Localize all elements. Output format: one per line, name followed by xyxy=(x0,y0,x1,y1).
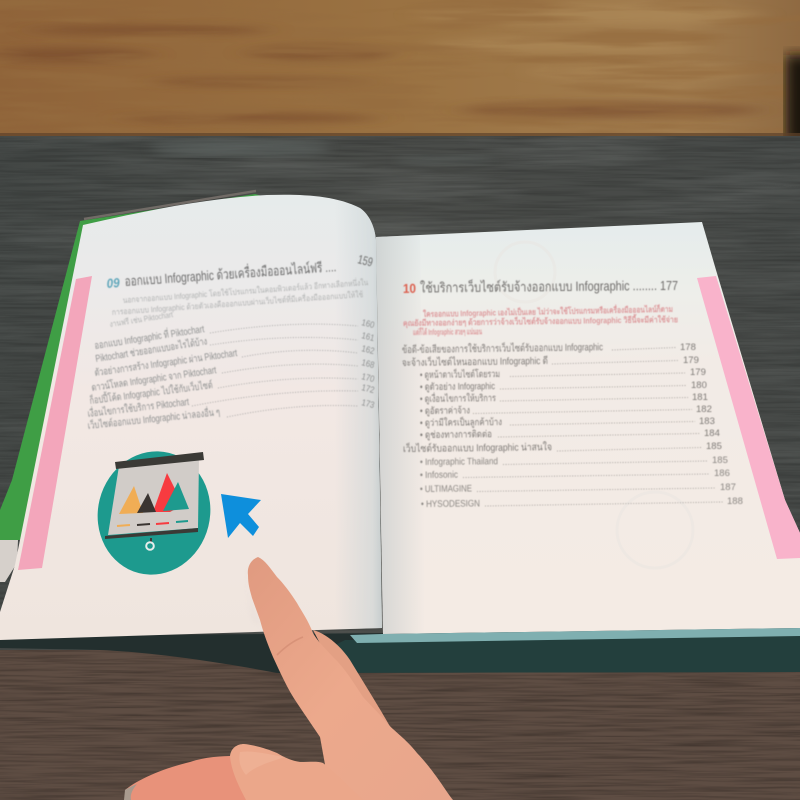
left toc row 160 xyxy=(93,317,376,352)
left intro paragraph: งานฟรี เช่น Piktochart xyxy=(109,310,174,329)
left toc row 162: 162 xyxy=(361,343,376,356)
teal circle backdrop xyxy=(85,439,223,587)
left toc row 161: Piktochart ช่วยออกแบบอะไรได้บ้าง xyxy=(95,335,208,365)
legend dashes xyxy=(117,521,188,526)
icon: blue cursor arrow xyxy=(221,494,261,538)
top bar xyxy=(115,452,204,469)
thumb shade xyxy=(239,752,285,775)
right chapter heading: ใช้บริการเว็บไซต์รับจ้างออกแบบ Infographic ........ xyxy=(420,276,657,295)
dark corner at wood right end xyxy=(786,55,800,145)
green back cover edge xyxy=(0,194,262,540)
right toc row 178: ข้อดี-ข้อเสียของการใช้บริการเว็บไซต์รับออกแบบ Infographic xyxy=(402,339,603,356)
left toc row 170: ก็อปปี้โค้ด Infographic ไปใช้กับเว็บไซต์ xyxy=(89,377,213,407)
projector screen xyxy=(108,458,199,535)
right toc row 180: • ดูตัวอย่าง Infographic xyxy=(420,381,495,393)
right toc row 178: 178 xyxy=(680,342,696,353)
thumb xyxy=(230,744,363,800)
index finger xyxy=(248,557,453,800)
right toc row 184: • ดูช่องทางการติดต่อ xyxy=(420,429,492,441)
right toc row HYSODESIGN: • HYSODESIGN xyxy=(421,498,480,510)
light wood tones xyxy=(447,10,746,74)
pull ring xyxy=(146,538,154,550)
right toc row 179: จะจ้างเว็บไซต์ไหนออกแบบ Infographic ดี xyxy=(402,353,548,369)
red intro paragraph: คุณยังมีทางออกง่ายๆ ด้วยการว่าจ้างเว็บไซต์รับจ้างออกแบบ Infographic วิธีนี้จะมีค่าใช้จ่าย xyxy=(403,312,678,329)
right toc row Infosonic: • Infosonic xyxy=(420,470,458,481)
left chapter heading: 09 xyxy=(106,275,121,291)
wooden wall background xyxy=(0,0,800,145)
right chapter heading: 177 xyxy=(660,279,678,293)
left toc row 168 xyxy=(91,357,376,394)
red intro paragraph: ใครออกแบบ Infographic เองไม่เป็นเลย ไม่ว่าจะใช้โปรแกรมหรือเครื่องมือออนไลน์ก็ตาม xyxy=(423,303,673,319)
fingernail xyxy=(124,784,137,800)
right toc row 182: • ดูอัตราค่าจ้าง xyxy=(420,405,470,417)
right toc row 183: 183 xyxy=(699,416,715,427)
right toc row 179: 179 xyxy=(683,355,699,366)
shadow of finger on page xyxy=(246,556,262,628)
left page table of contents xyxy=(87,252,376,432)
right toc row 179 sub: • ดูหน้าตาเว็บไซต์โดยรวม xyxy=(420,367,500,381)
right toc row 185: 185 xyxy=(706,441,722,452)
right toc row 181: 181 xyxy=(692,392,708,403)
teal book edge xyxy=(350,628,800,643)
right toc row 180 xyxy=(420,380,707,393)
right toc row 184: 184 xyxy=(704,428,720,439)
red intro paragraph: แต่ก็ได้ Infographic สวยๆ แน่นอน xyxy=(413,325,482,337)
right toc row 183: • ดูว่ามีใครเป็นลูกค้าบ้าง xyxy=(420,415,502,429)
left toc row 170: 170 xyxy=(361,371,376,384)
right toc row 179 sub xyxy=(420,367,706,381)
brown table lower edge xyxy=(0,650,800,800)
right toc row Infographic Thailand: 185 xyxy=(712,455,728,466)
left toc row 173: 173 xyxy=(361,397,376,410)
right toc row ULTIMAGINE: 187 xyxy=(720,482,736,493)
dark wood streaks xyxy=(0,25,760,123)
right toc row 179 xyxy=(402,353,699,369)
left page xyxy=(0,190,385,640)
right toc row 182 xyxy=(420,404,712,417)
left pink strip xyxy=(18,276,92,570)
left chapter heading: ออกแบบ Infographic ด้วยเครื่องมือออนไลน์ฟรี .... xyxy=(124,257,337,289)
right toc row 181 xyxy=(420,391,708,405)
left toc row 172: เงื่อนไขการใช้บริการ Piktochart xyxy=(87,394,190,420)
left toc row 161 xyxy=(95,330,376,365)
left toc row 161: 161 xyxy=(361,330,376,343)
left toc row 168: 168 xyxy=(361,357,376,370)
gray cover block at lower left xyxy=(0,540,18,582)
right toc row 184 xyxy=(420,428,720,441)
right toc row Infosonic xyxy=(420,468,730,481)
right toc row 179 sub: 179 xyxy=(690,367,706,378)
hand holding the book xyxy=(124,556,453,800)
right toc row 183 xyxy=(420,415,715,429)
right toc row 180: 180 xyxy=(691,380,707,391)
right toc row 181: • ดูเงื่อนไขการให้บริการ xyxy=(420,391,496,405)
left toc row 168: ดาวน์โหลด Infographic จาก Piktochart xyxy=(91,363,217,394)
faint watermark circles xyxy=(495,242,693,568)
shadow under book xyxy=(0,630,800,673)
right toc row 185 xyxy=(403,439,722,455)
left toc row 173 xyxy=(87,397,376,432)
left toc row 173: เว็บไซต์ออกแบบ Infographic น่าลองอื่น ๆ xyxy=(87,404,221,432)
right toc row HYSODESIGN: 188 xyxy=(727,496,743,507)
left toc row 172: 172 xyxy=(361,382,376,395)
right pink strip xyxy=(697,276,800,559)
red intro paragraph xyxy=(403,303,678,337)
right toc row ULTIMAGINE: • ULTIMAGINE xyxy=(420,483,472,495)
right toc row Infographic Thailand: • Infographic Thailand xyxy=(420,456,498,468)
right chapter heading: 10 xyxy=(403,281,416,296)
right toc row 182: 182 xyxy=(696,404,712,415)
middle finger behind xyxy=(313,630,392,730)
left toc row 162: ตัวอย่างการสร้าง Infographic ผ่าน Piktochart xyxy=(94,347,238,379)
left intro paragraph: การออกแบบ Infographic ด้วยตัวเองคือออกแบบผ่านเว็บไซต์ที่มีเครื่องมือออกแบบให้ใช้ xyxy=(111,288,364,317)
left toc row 172 xyxy=(87,382,376,420)
dark slate table xyxy=(0,136,800,656)
left toc row 162 xyxy=(94,343,376,379)
page block edge behind left page xyxy=(84,191,256,219)
lying finger xyxy=(125,756,250,800)
left chapter heading: 159 xyxy=(356,252,374,270)
right toc row 185: เว็บไซต์รับออกแบบ Infographic น่าสนใจ xyxy=(403,439,552,455)
chart triangles xyxy=(119,473,189,514)
right toc row Infosonic: 186 xyxy=(714,468,730,479)
bottom bar xyxy=(105,528,198,539)
right toc row ULTIMAGINE xyxy=(420,482,736,495)
right page xyxy=(376,222,800,634)
left intro paragraph xyxy=(109,276,369,329)
joint crease xyxy=(277,637,303,655)
left intro paragraph: นอกจากออกแบบ Infographic โดยใช้โปรแกรมในคอมพิวเตอร์แล้ว อีกทางเลือกหนึ่งใน xyxy=(122,276,369,305)
right toc row HYSODESIGN xyxy=(421,496,743,510)
left toc row 160: ออกแบบ Infographic ที่ Piktochart xyxy=(93,321,205,352)
left toc row 170 xyxy=(89,371,376,407)
icon: presentation screen with chart xyxy=(85,439,223,587)
teal shadow reflection under right page xyxy=(280,636,800,673)
right toc row Infographic Thailand xyxy=(420,455,728,468)
right page table of contents xyxy=(402,276,743,510)
left toc row 160: 160 xyxy=(361,317,376,330)
